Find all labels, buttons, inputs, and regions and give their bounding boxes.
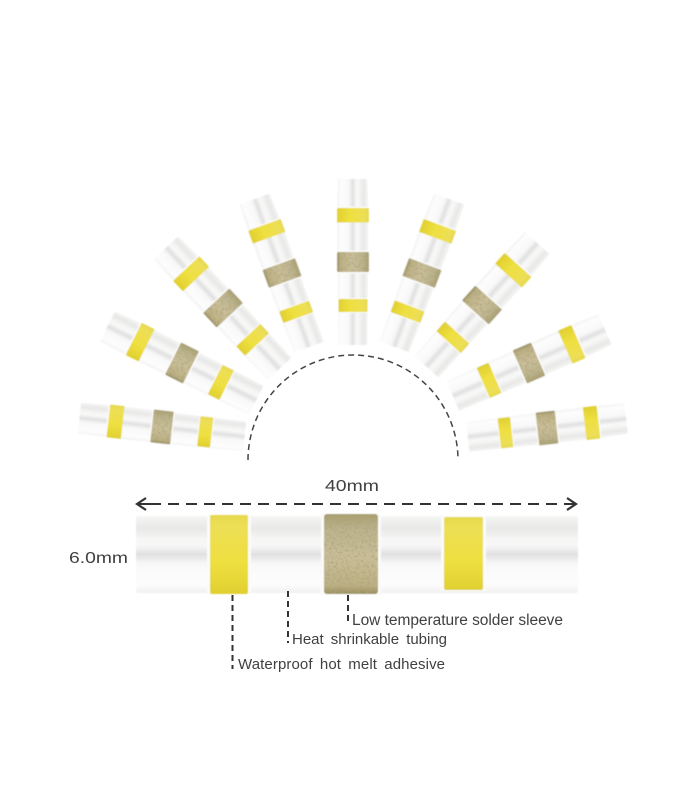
label: adhesive: Waterproof hot melt adhesive	[238, 656, 445, 673]
leader line: solder sleeve	[347, 595, 349, 624]
connector 5	[336, 179, 370, 345]
label: tubing: Heat shrinkable tubing	[292, 631, 447, 648]
leader line: tubing	[287, 591, 289, 643]
connector 4	[238, 193, 326, 353]
left yellow adhesive band	[207, 515, 251, 594]
connector 2	[99, 309, 265, 417]
dashed semicircle arc	[248, 355, 458, 460]
label: 6.0mm: 6.0mm	[69, 550, 128, 567]
connector 3	[152, 234, 294, 382]
connector 7	[412, 231, 552, 379]
right yellow adhesive band	[441, 516, 486, 591]
connector 6	[377, 193, 467, 353]
solder sleeve band	[321, 513, 381, 595]
leader line: adhesive	[232, 595, 234, 669]
label: 40mm: 40mm	[325, 478, 379, 495]
large connector	[136, 513, 578, 595]
dimension arrow: 40mm	[137, 498, 576, 510]
label: solder sleeve: Low temperature solder sleeve	[352, 612, 563, 629]
connector 9	[466, 402, 628, 454]
connector 8	[445, 312, 613, 414]
connector 1	[78, 400, 246, 454]
tube body	[136, 516, 578, 593]
fan of small connectors	[78, 179, 628, 454]
